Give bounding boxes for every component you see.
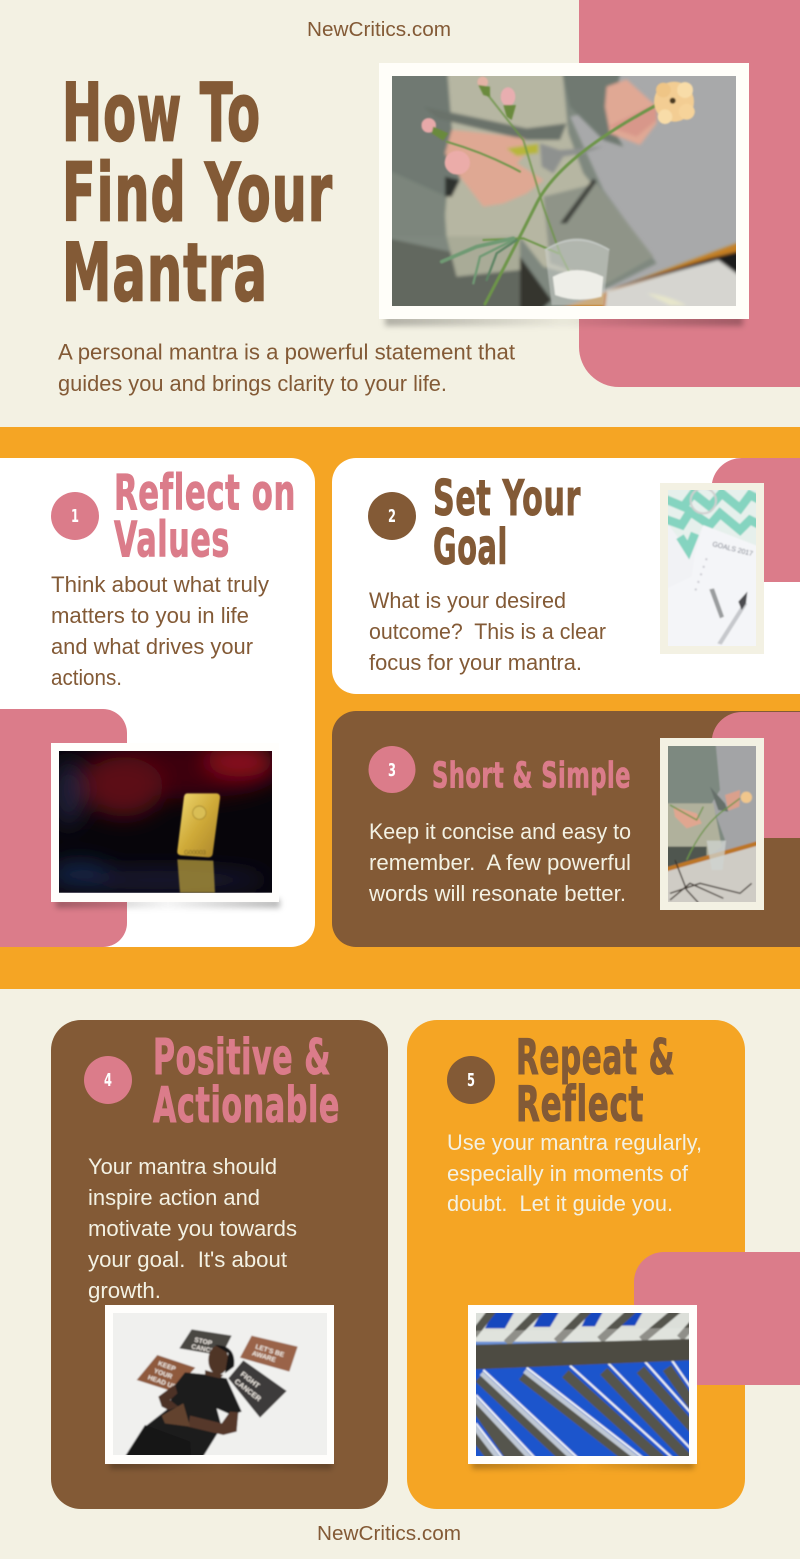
step 1 badge bbox=[51, 492, 99, 540]
heading 1: Values bbox=[114, 512, 230, 568]
photo: person lying among signs: KEEP bbox=[157, 1360, 177, 1373]
heading 3: Short & Simple bbox=[432, 756, 631, 796]
body text 5: doubt. Let it guide you. bbox=[447, 1191, 673, 1216]
body text 4 bbox=[88, 1154, 297, 1303]
title: Mantra bbox=[62, 226, 268, 320]
panel 4: positive and actionable bbox=[51, 1020, 388, 1509]
heading 1 bbox=[114, 464, 296, 568]
body text 3 bbox=[368, 819, 631, 906]
step 3 badge: 3 bbox=[388, 760, 396, 781]
orange band bbox=[0, 427, 800, 989]
subtitle bbox=[58, 340, 516, 396]
heading 5 bbox=[516, 1029, 675, 1133]
photo: person lying among signs: STOP bbox=[194, 1337, 213, 1347]
step 4 badge bbox=[84, 1056, 132, 1104]
photo: person lying among signs: FIGHT bbox=[239, 1369, 262, 1390]
header pink shape bbox=[579, 0, 800, 387]
pink accent block bbox=[0, 709, 127, 947]
heading 2: Set Your bbox=[433, 470, 581, 527]
photo: person lying among signs: LET'S BE bbox=[254, 1344, 285, 1359]
body text 1: actions. bbox=[51, 665, 122, 690]
photo: person lying among signs: AWARE bbox=[251, 1350, 277, 1364]
hero photo: hands arranging flowers bbox=[379, 63, 750, 326]
body text 4: inspire action and bbox=[88, 1185, 260, 1210]
body text 3: Keep it concise and easy to bbox=[369, 819, 631, 844]
heading 4 bbox=[153, 1029, 340, 1134]
heading 5: Repeat & bbox=[516, 1029, 675, 1086]
pink accent block bbox=[712, 712, 800, 838]
subtitle: guides you and brings clarity to your life. bbox=[58, 371, 447, 396]
photo: blue sky through pergola bbox=[457, 1305, 702, 1471]
photo: goals notebook and pen: GOALS 2017 bbox=[712, 541, 754, 558]
panel 3: short and simple bbox=[332, 711, 800, 947]
step 5 badge bbox=[447, 1056, 495, 1104]
body text 5 bbox=[447, 1130, 702, 1216]
panel 2: set your goal bbox=[332, 458, 800, 694]
pink accent block bbox=[712, 458, 800, 582]
title: Find Your bbox=[62, 146, 333, 240]
body text 3: remember. A few powerful bbox=[369, 850, 631, 875]
heading 4: Positive & bbox=[153, 1029, 331, 1086]
photo: person lying among signs: CANCER bbox=[233, 1377, 264, 1404]
photo: person lying among signs bbox=[103, 1305, 337, 1469]
step 5 badge: 5 bbox=[467, 1070, 475, 1091]
photo: gold bar bbox=[47, 742, 280, 908]
heading 4: Actionable bbox=[153, 1077, 340, 1134]
bottom site credit: NewCritics.com bbox=[317, 1523, 461, 1545]
step 3 badge bbox=[368, 746, 416, 793]
body text 4: growth. bbox=[88, 1278, 161, 1303]
body text 5: especially in moments of bbox=[447, 1161, 689, 1186]
top site credit: NewCritics.com bbox=[307, 19, 451, 41]
body text 4: Your mantra should bbox=[88, 1154, 277, 1179]
photo: person lying among signs: YOUR bbox=[153, 1368, 173, 1381]
photo: florist at table bbox=[660, 737, 764, 910]
photo: person lying among signs: CANCER bbox=[191, 1343, 220, 1356]
body text 1: Think about what truly bbox=[51, 572, 269, 597]
body text 5: Use your mantra regularly, bbox=[447, 1130, 702, 1155]
title: How To bbox=[62, 66, 261, 160]
panel 1: reflect on values bbox=[0, 458, 315, 947]
photo: person lying among signs: HEAD UP bbox=[147, 1374, 178, 1391]
body text 3: words will resonate better. bbox=[368, 881, 626, 906]
body text 1 bbox=[51, 572, 269, 690]
body text 2: outcome? This is a clear bbox=[369, 619, 606, 644]
photo: gold bar: G00003 bbox=[184, 850, 206, 857]
step 2 badge bbox=[368, 492, 416, 540]
heading 1: Reflect on bbox=[114, 464, 296, 522]
body text 1: and what drives your bbox=[51, 634, 253, 659]
body text 4: motivate you towards bbox=[88, 1216, 297, 1241]
panel 5: repeat and reflect bbox=[407, 1020, 800, 1509]
body text 2: focus for your mantra. bbox=[369, 650, 582, 675]
photo: goals notebook and pen bbox=[660, 483, 764, 654]
step 4 badge: 4 bbox=[104, 1070, 112, 1091]
body text 4: your goal. It's about bbox=[88, 1247, 287, 1272]
pink accent block bbox=[634, 1252, 800, 1385]
step 1 badge: 1 bbox=[71, 506, 79, 527]
subtitle: A personal mantra is a powerful statement that bbox=[58, 340, 516, 364]
body text 2: What is your desired bbox=[369, 588, 566, 613]
title bbox=[62, 66, 333, 320]
step 2 badge: 2 bbox=[388, 506, 396, 527]
heading 2: Goal bbox=[433, 519, 508, 576]
body text 2 bbox=[369, 588, 606, 675]
heading 2 bbox=[433, 470, 581, 576]
body text 1: matters to you in life bbox=[51, 603, 249, 628]
heading 5: Reflect bbox=[516, 1076, 644, 1133]
